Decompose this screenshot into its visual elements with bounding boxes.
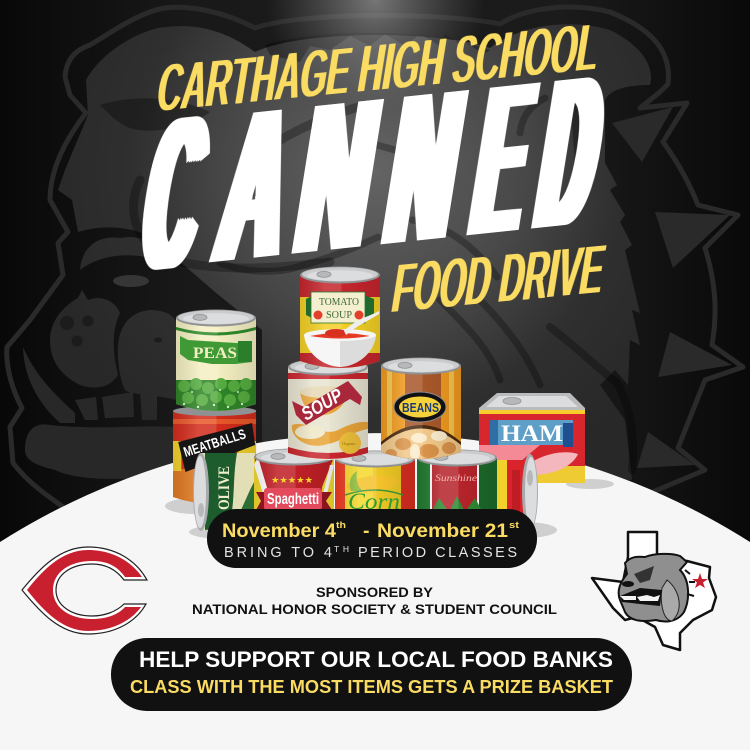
sponsor text: NATIONAL HONOR SOCIETY & STUDENT COUNCIL (192, 602, 557, 617)
white curved base (0, 433, 750, 750)
instruction: BRING TO 4 (224, 545, 332, 561)
bowl of soup (304, 335, 376, 367)
can: meatballs: MEATBALLS (182, 427, 248, 461)
can: peas (176, 310, 256, 418)
label: beans oval (394, 392, 446, 422)
can: ham: HAM (501, 421, 563, 446)
label: tomato soup (306, 295, 374, 319)
watermark muzzle and jaw (23, 237, 177, 479)
spotlight beam (260, 0, 490, 110)
date range (222, 520, 520, 542)
instruction: PERIOD CLASSES (358, 545, 517, 561)
watermark face (58, 24, 651, 480)
watermark collar spikes (612, 107, 732, 468)
can: ham (479, 393, 585, 483)
pill: dates (207, 509, 537, 568)
can: spaghetti (254, 448, 334, 509)
label: organic seal: Organic (342, 441, 356, 446)
pill: call to action (111, 638, 632, 711)
title: Canned: C (130, 68, 219, 318)
label: meatballs banner (178, 423, 255, 472)
date range: November 4 (222, 520, 336, 542)
can: peas: PEAS (193, 345, 237, 362)
logo: Texas bulldog (592, 532, 716, 650)
label: peas banner (180, 336, 252, 364)
label: stars: ★★★★★ (271, 476, 313, 486)
can: olive (lying) (193, 453, 255, 531)
can: pineapple (417, 450, 497, 509)
date range: - (363, 520, 370, 542)
date range: th (336, 520, 346, 531)
date range: st (509, 520, 520, 531)
bulldog head (619, 554, 688, 622)
can: tomato soup (300, 266, 380, 375)
watermark face lines (133, 98, 633, 470)
label: soup ribbon (292, 381, 362, 425)
can: olive (lying): OLIVE (216, 466, 233, 510)
support headline: HELP SUPPORT OUR LOCAL FOOD BANKS (139, 647, 613, 672)
instruction (224, 544, 517, 561)
can: corn (335, 450, 415, 509)
can: beans: BEANS (402, 400, 439, 415)
prize line: CLASS WITH THE MOST ITEMS GETS A PRIZE BASKET (130, 677, 613, 697)
title: Canned (130, 26, 616, 318)
can: tomato soup: TOMATO (319, 296, 359, 308)
can: beans (381, 358, 461, 466)
can: meatballs (173, 406, 256, 511)
title: Canned: N (374, 41, 476, 292)
sponsor text: SPONSORED BY (316, 585, 433, 600)
label: pineapple script: Sunshine (435, 473, 477, 483)
title: Canned: N (284, 50, 391, 302)
instruction: TH (334, 544, 349, 554)
logo: red C (22, 547, 147, 634)
watermark nose and bowling holes (60, 316, 162, 346)
label: spaghetti: Spaghetti (267, 491, 319, 508)
watermark dark brows (100, 33, 590, 162)
watermark outline (7, 7, 743, 507)
can: soup: SOUP (298, 385, 347, 425)
can: tomato soup: SOUP (326, 309, 352, 321)
can: soup (288, 358, 368, 467)
title: Canned: A (205, 59, 306, 310)
sponsor text (192, 585, 557, 617)
label: corn script: Corn (348, 489, 400, 514)
text: D (525, 26, 616, 276)
can shadows (165, 479, 614, 539)
can: lying red can (497, 454, 538, 532)
title: Canned: E (461, 34, 546, 283)
date range: November 21 (377, 520, 508, 542)
red star (692, 573, 708, 588)
background bulldog watermark (7, 7, 743, 507)
